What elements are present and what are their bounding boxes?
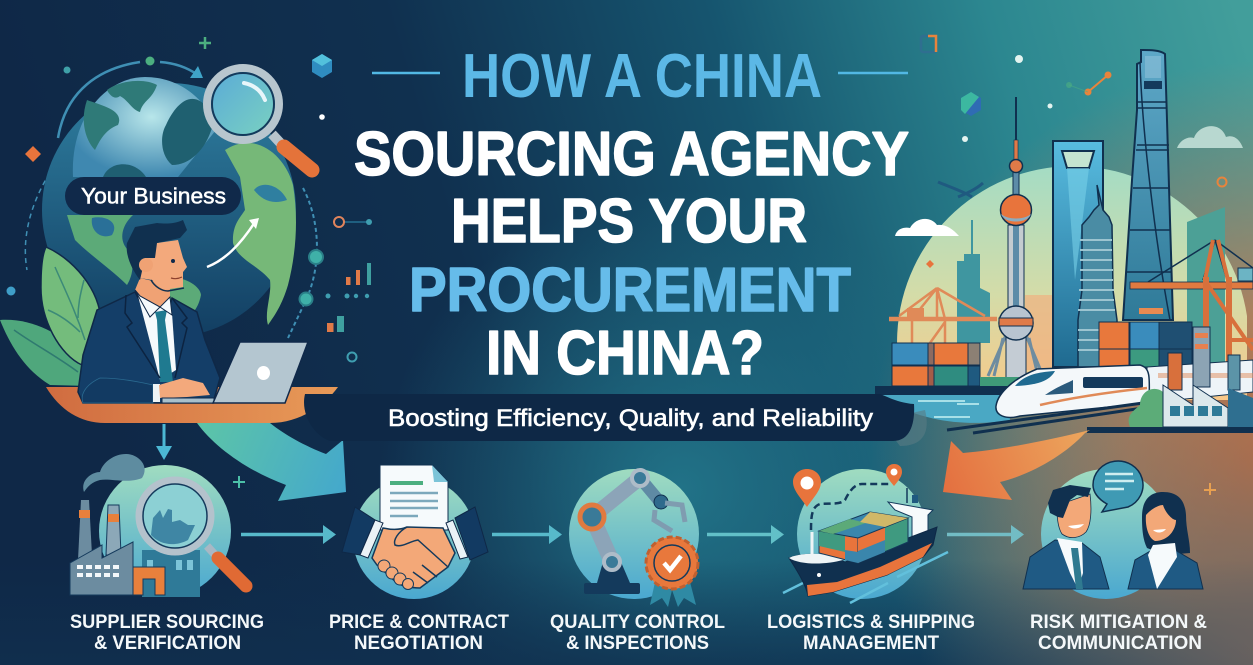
building: Oriental Pearl Tower (988, 97, 1043, 378)
decorative plus orange (1204, 483, 1216, 495)
building: Shanghai Tower (1123, 50, 1173, 320)
arrow: step 4 to 5 (947, 525, 1024, 544)
label (329, 612, 509, 654)
panel: Shanghai skyline illustration (875, 36, 1253, 433)
arrow: growth (207, 218, 259, 267)
label: Your Business (65, 177, 241, 215)
building: right glass tower (1187, 207, 1225, 380)
step 1: supplier sourcing (70, 454, 264, 654)
title accent lines (372, 72, 908, 74)
icon: quality badge (646, 537, 698, 607)
icon: magnifying glass (207, 68, 312, 170)
panel: desk (46, 387, 338, 423)
label: COMMUNICATION (1038, 633, 1202, 654)
step 2: price and contract (329, 465, 509, 654)
icon: document (380, 465, 448, 530)
icon: speech bubble (1093, 461, 1143, 512)
icon: small upper globe (73, 77, 216, 177)
containers: right stack (1099, 322, 1192, 367)
step circle (569, 469, 699, 599)
step circle (353, 477, 475, 599)
icon: bullet train (947, 360, 1253, 433)
step 3: quality control (550, 469, 725, 654)
arrow: down from desk (156, 424, 172, 460)
icon: location pins (793, 464, 902, 507)
containers: left stack (892, 343, 980, 386)
icon: handshake (342, 507, 488, 590)
step 4: logistics and shipping (767, 464, 975, 654)
icon: water streaks (783, 552, 948, 603)
arrow: teal curved arrow (197, 423, 346, 501)
icon: leaves (0, 247, 100, 386)
label: MANAGEMENT (803, 633, 939, 654)
crane: left (889, 288, 997, 343)
label (550, 612, 725, 654)
label: PRICE & CONTRACT (329, 612, 509, 633)
icon: magnifier (139, 480, 246, 586)
crane: right (1130, 240, 1253, 370)
building: World Financial Center (1053, 141, 1103, 367)
title line 1: HOW A CHINA (462, 42, 822, 111)
label: RISK MITIGATION & (1030, 612, 1207, 633)
panel: business hero illustration (0, 37, 372, 423)
icon: container ship (789, 488, 937, 596)
decorative icons right (921, 36, 1226, 268)
title line 4: PROCUREMENT (409, 256, 851, 325)
title (354, 42, 909, 388)
label (70, 612, 264, 654)
label: Your Business: Your Business (81, 184, 226, 208)
building: pale block (1025, 295, 1055, 370)
icon: factory (70, 500, 200, 597)
label: & INSPECTIONS (566, 633, 709, 654)
icon: orbit arc with arrow (25, 62, 317, 338)
icon: factory (1087, 327, 1253, 433)
icon: route dashes (811, 484, 890, 530)
decorative plus (233, 476, 245, 488)
title line 3: HELPS YOUR (451, 187, 807, 256)
title line 2: SOURCING AGENCY (354, 120, 909, 189)
label: QUALITY CONTROL (550, 612, 725, 633)
ground and water (875, 377, 1020, 423)
icon: smoke cloud (83, 454, 145, 492)
label (1030, 612, 1207, 654)
icon: businessman (78, 220, 220, 403)
arrow: step 3 to 4 (707, 525, 784, 544)
label (767, 612, 975, 654)
label: & VERIFICATION (94, 633, 241, 654)
icon: businessman (1023, 485, 1109, 589)
title line 5: IN CHINA? (486, 319, 764, 388)
icon: laptop (162, 342, 308, 403)
arrow: orange curved arrow (943, 430, 1090, 500)
label: NEGOTIATION (354, 633, 483, 654)
subtitle banner (304, 394, 927, 446)
step circle (99, 465, 231, 597)
icon: large globe (42, 83, 296, 337)
shape: dome sky (897, 166, 1247, 400)
arrow: step 1 to 2 (241, 525, 336, 544)
step circle (797, 469, 927, 599)
step circle (1041, 469, 1171, 599)
label: LOGISTICS & SHIPPING (767, 612, 975, 633)
arrow: step 2 to 3 (492, 525, 562, 544)
label: SUPPLIER SOURCING (70, 612, 264, 633)
subtitle banner: Boosting Efficiency, Quality, and Reliability (388, 405, 873, 432)
step 5: risk mitigation (1023, 461, 1207, 654)
icon: businesswoman (1128, 492, 1203, 589)
icon: clouds (895, 126, 1243, 236)
building: Jin Mao Tower (1078, 185, 1117, 367)
icon: robot arm (580, 470, 685, 594)
decorative icons (6, 37, 372, 362)
icon: airplane (938, 182, 983, 197)
building: background teal tower (957, 220, 990, 343)
